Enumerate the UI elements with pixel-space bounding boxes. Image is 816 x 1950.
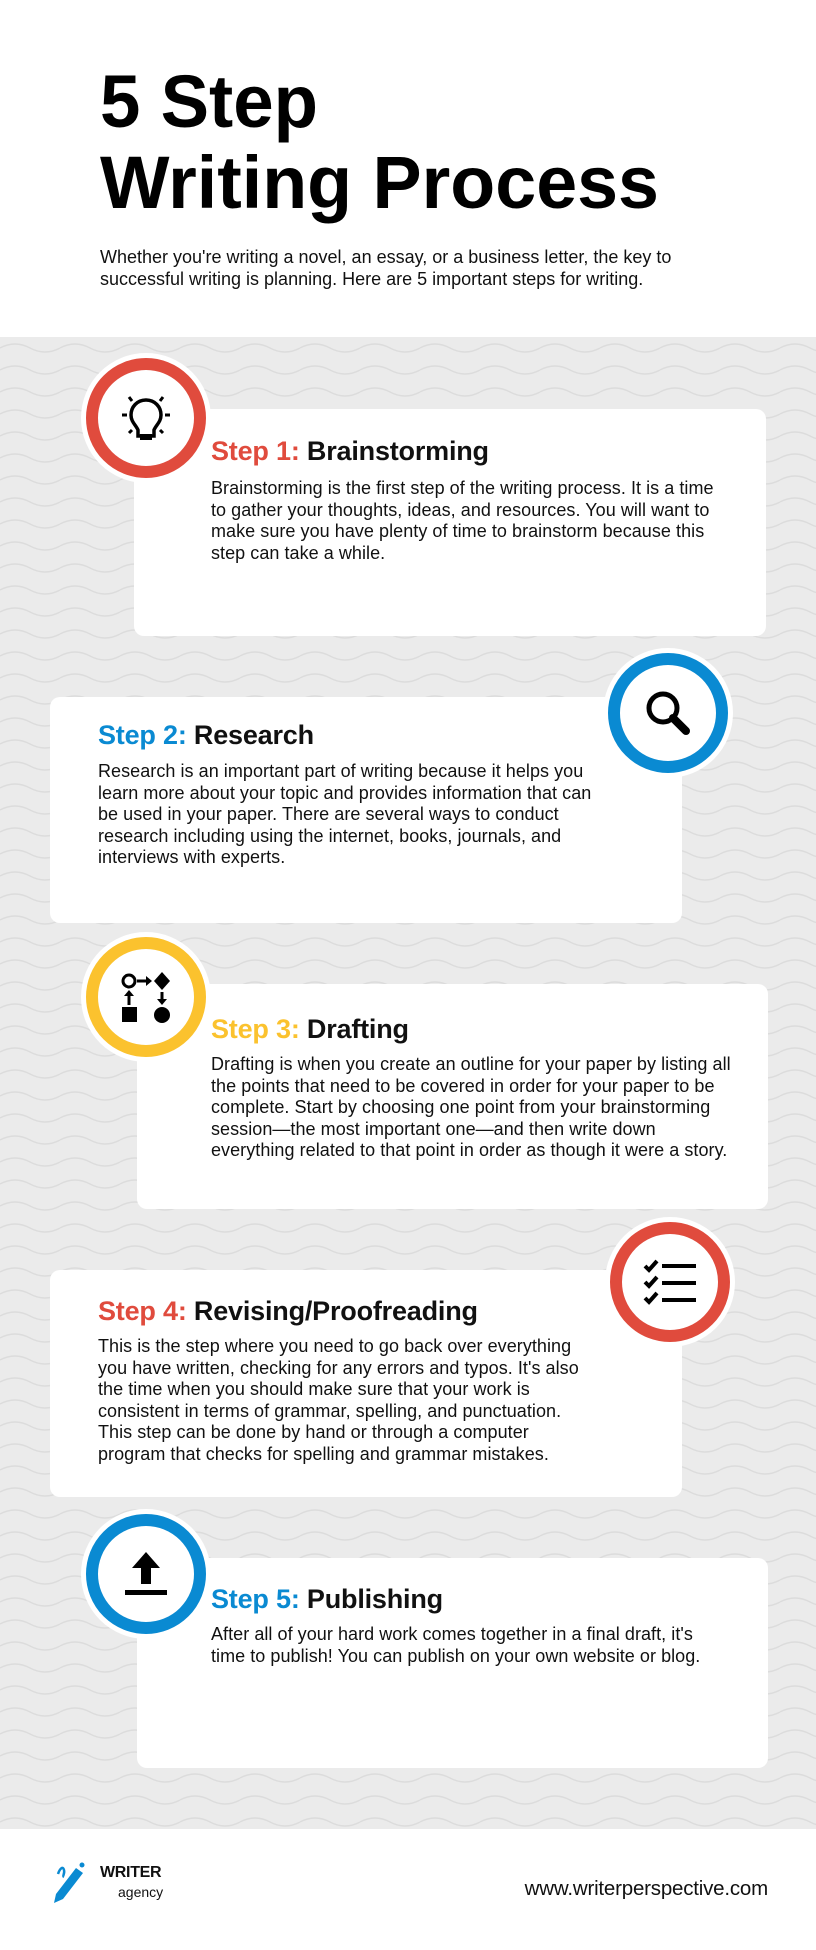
step 3 text: Drafting is when you create an outline for your paper by listing all [211,1054,731,1074]
icon: lightbulb [81,353,211,483]
title: 5 Step [100,60,318,143]
icon: flowchart [81,932,211,1062]
panel: step 4 [50,1270,682,1497]
website url: www.writerperspective.com [525,1877,768,1900]
step 1 text: make sure you have plenty of time to brainstorm because this [211,521,704,541]
background panel [0,337,816,1829]
panel: step 3 [137,984,768,1209]
step 4 text: the time when you should make sure that your work is [98,1379,530,1399]
icon: magnifier [603,648,733,778]
step 4 text: program that checks for spelling and grammar mistakes. [98,1444,549,1464]
subtitle [100,247,671,289]
step 4 text [98,1336,579,1464]
step 2 text: learn more about your topic and provides information that can [98,783,591,803]
footer logo: WRITER [100,1864,161,1881]
title [100,60,659,224]
step 2 text: be used in your paper. There are several ways to conduct [98,804,559,824]
step 1 text: to gather your thoughts, ideas, and resources. You will want to [211,500,709,520]
step 3 text: the points that need to be covered in order for your paper to be [211,1076,715,1096]
panel: step 2 [50,697,682,923]
icon: upload [81,1509,211,1639]
step 4 text: This is the step where you need to go back over everything [98,1336,571,1356]
step 3 heading: Step 3: Drafting [211,1014,409,1044]
panel: step 5 [137,1558,768,1768]
step 4 text: This step can be done by hand or through a computer [98,1422,529,1442]
step 1 text [211,478,714,563]
step 1 heading: Step 1: Brainstorming [211,436,489,466]
step 2 text: interviews with experts. [98,847,285,867]
step 3 text: session—the most important one—and then write down [211,1119,656,1139]
step 1 text: Brainstorming is the first step of the writing process. It is a time [211,478,714,498]
title: Writing Process [100,141,659,224]
step 3 text [211,1054,731,1160]
step 2 text [98,761,591,867]
step 5 text: time to publish! You can publish on your own website or blog. [211,1646,700,1666]
step 3 text: everything related to that point in order as though it were a story. [211,1140,727,1160]
subtitle: Whether you're writing a novel, an essay, or a business letter, the key to [100,247,671,267]
step 3 text: complete. Start by choosing one point from your brainstorming [211,1097,710,1117]
step 2 text: research including using the internet, books, journals, and [98,826,561,846]
icon: checklist [605,1217,735,1347]
step 1 text: step can take a while. [211,543,385,563]
step 5 heading: Step 5: Publishing [211,1584,443,1614]
step 5 text: After all of your hard work comes together in a final draft, it's [211,1624,693,1644]
step 2 text: Research is an important part of writing because it helps you [98,761,583,781]
step 4 heading: Step 4: Revising/Proofreading [98,1296,478,1326]
step 5 text [211,1624,700,1666]
step 4 text: you have written, checking for any errors and typos. It's also [98,1358,579,1378]
footer logo [54,1862,164,1903]
icon: pen [54,1862,84,1903]
panel: step 1 [134,409,766,636]
step 2 heading: Step 2: Research [98,720,314,750]
footer logo: agency [118,1884,163,1900]
step 4 text: consistent in terms of grammar, spelling, and punctuation. [98,1401,561,1421]
subtitle: successful writing is planning. Here are 5 important steps for writing. [100,268,643,288]
